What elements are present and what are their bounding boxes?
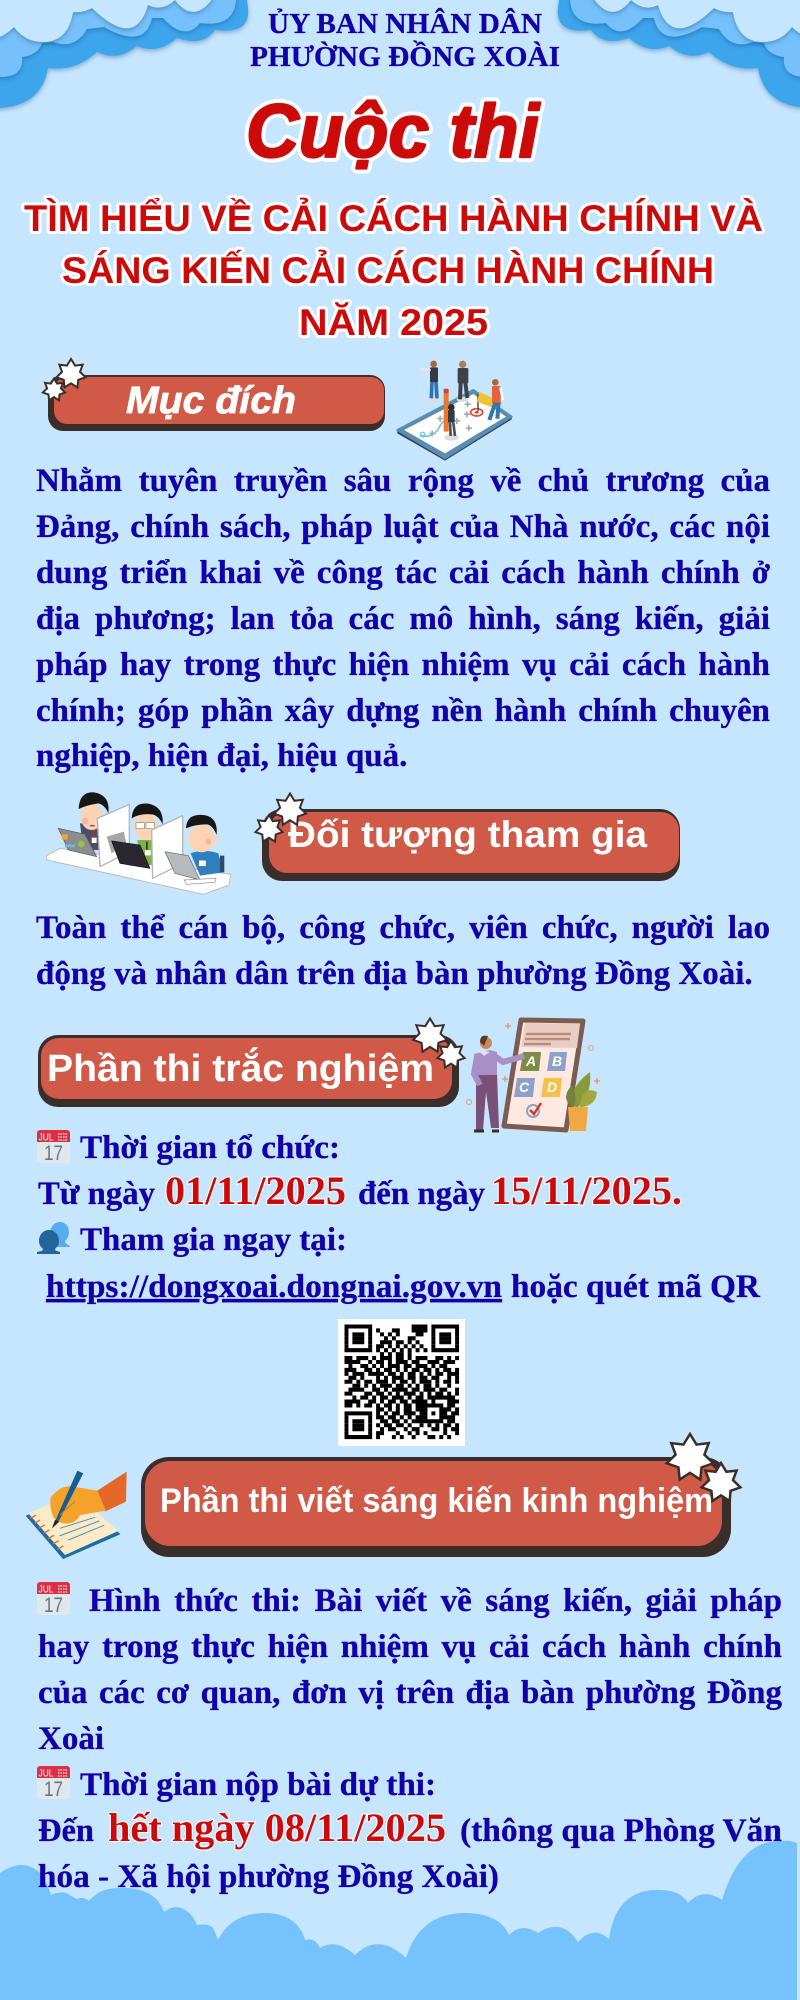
submission deadline text: (thông qua Phòng Văn	[460, 1813, 782, 1849]
text block: purpose paragraph: dung triển khai về công tác cải cách hành chính ở	[36, 555, 770, 591]
text block: purpose paragraph: Đảng, chính sách, pháp luật của Nhà nước, các nội	[36, 509, 770, 545]
illustration: person with quiz phone: B	[552, 1053, 562, 1069]
header: issuing authority	[250, 7, 560, 73]
illustration: team on tablet	[397, 361, 512, 461]
subtitle	[24, 197, 763, 343]
text block: purpose paragraph: Nhằm tuyên truyền sâu rộng về chủ trương của	[36, 463, 770, 499]
submission deadline text: Thời gian nộp bài dự thi:	[80, 1767, 436, 1803]
text block: participants paragraph	[36, 910, 770, 992]
button: Phần thi trắc nghiệm: Phần thi trắc nghiệm	[47, 1046, 434, 1090]
text block: purpose paragraph: pháp hay trong thực hiện nhiệm vụ cải cách hành	[36, 647, 770, 683]
text block: entry form paragraph: hay trong thực hiện nhiệm vụ cải cách hành chính	[38, 1629, 782, 1665]
text block: purpose paragraph	[36, 463, 770, 774]
icon: calendar (entry form): JUL	[38, 1584, 54, 1596]
text block: entry form paragraph: của các cơ quan, đơn vị trên địa bàn phường Đồng	[38, 1675, 782, 1711]
illustration: person with quiz phone: C	[519, 1079, 530, 1095]
icon: calendar (entry form): 17	[44, 1594, 63, 1617]
text block: purpose paragraph: nghiệp, hiện đại, hiệu quả.	[36, 738, 407, 774]
text block: participants paragraph: động và nhân dân trên địa bàn phường Đồng Xoài.	[36, 956, 753, 992]
button: Phần thi viết sáng kiến kinh nghiệm: Phần thi viết sáng kiến kinh nghiệm	[160, 1482, 713, 1520]
illustration: hand writing in notebook	[27, 1471, 127, 1558]
text block: entry form paragraph	[38, 1583, 782, 1757]
text block: purpose paragraph: địa phương; lan tỏa các mô hình, sáng kiến, giải	[36, 601, 770, 637]
illustration: office workers at computers	[47, 792, 231, 894]
icon: calendar (submission): JUL	[38, 1768, 54, 1780]
text block: participants paragraph: Toàn thể cán bộ, công chức, viên chức, người lao	[36, 910, 770, 946]
contest period text: 15/11/2025.	[491, 1168, 682, 1213]
button: Mục đích: Mục đích	[126, 380, 296, 422]
join link text: hoặc quét mã QR	[511, 1269, 761, 1305]
subtitle: NĂM 2025	[299, 302, 488, 343]
illustration: person with quiz phone: A	[525, 1053, 536, 1069]
contest period text: Từ ngày	[38, 1176, 155, 1212]
subtitle: SÁNG KIẾN CẢI CÁCH HÀNH CHÍNH	[62, 250, 714, 291]
illustration: person with quiz phone	[466, 1020, 600, 1131]
text block: entry form paragraph: Hình thức thi: Bài viết về sáng kiến, giải pháp	[89, 1583, 782, 1619]
header: issuing authority: PHƯỜNG ĐỒNG XOÀI	[250, 39, 560, 73]
submission deadline text: hết ngày 08/11/2025	[108, 1805, 446, 1850]
icon: calendar (time held): 17	[44, 1142, 63, 1165]
submission deadline text: Đến	[38, 1813, 94, 1849]
subtitle: TÌM HIỂU VỀ CẢI CÁCH HÀNH CHÍNH VÀ	[24, 197, 763, 239]
header: issuing authority: ỦY BAN NHÂN DÂN	[268, 7, 542, 40]
title: Cuộc thi: Cuộc thi	[246, 89, 541, 173]
join link text	[46, 1222, 761, 1305]
contest period text: đến ngày	[358, 1176, 485, 1212]
icon: calendar (entry form)	[37, 1582, 70, 1617]
join link text: https://dongxoai.dongnai.gov.vn	[46, 1269, 502, 1305]
illustration: person with quiz phone: D	[547, 1079, 557, 1095]
button: Đối tượng tham gia	[255, 794, 680, 881]
button: Mục đích	[43, 359, 385, 431]
text block: purpose paragraph: chính; góp phần xây dựng nền hành chính chuyên	[36, 693, 770, 729]
contest period text: 01/11/2025	[165, 1168, 346, 1213]
icon: people silhouette	[37, 1222, 70, 1254]
title: Cuộc thi: Cuộc thi	[246, 89, 541, 173]
text block: entry form paragraph: Xoài	[38, 1721, 104, 1757]
bottom cloud band	[0, 1841, 797, 2000]
contest period text: Thời gian tổ chức:	[80, 1130, 340, 1166]
top right clouds	[558, 0, 800, 108]
button: Phần thi trắc nghiệm	[38, 1018, 465, 1107]
submission deadline text	[38, 1767, 782, 1895]
icon: calendar (submission): 17	[44, 1778, 63, 1801]
contest period text	[38, 1130, 682, 1213]
icon: calendar (submission)	[37, 1766, 70, 1801]
submission deadline text: hóa - Xã hội phường Đồng Xoài)	[38, 1859, 499, 1895]
icon: calendar (time held): JUL	[38, 1132, 54, 1144]
button: Phần thi viết sáng kiến kinh nghiệm	[141, 1434, 740, 1557]
join link text: Tham gia ngay tại:	[80, 1222, 347, 1258]
icon: calendar (time held)	[37, 1130, 70, 1165]
button: Đối tượng tham gia: Đối tượng tham gia	[288, 814, 647, 855]
QR code	[338, 1319, 465, 1446]
top left clouds	[0, 0, 248, 108]
